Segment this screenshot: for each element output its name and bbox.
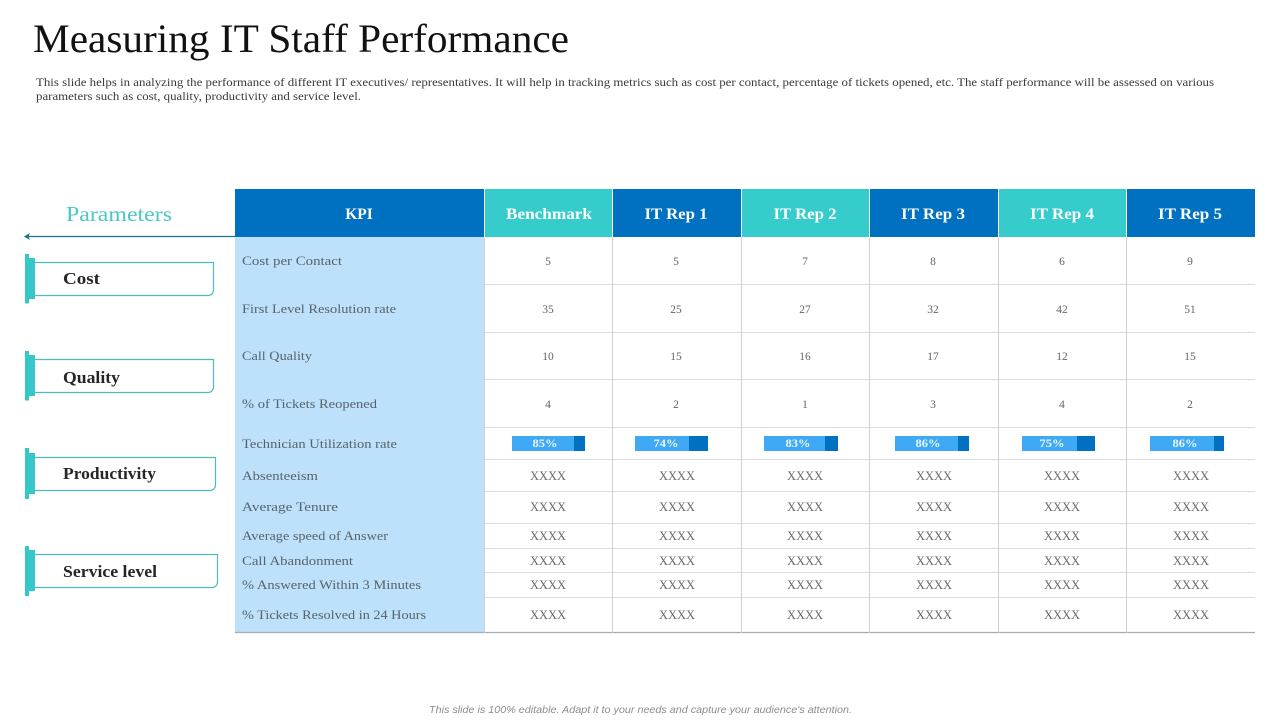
row: First Level Resolution rate: 42 [1056, 304, 1068, 316]
row: Average speed of Answer: XXXX [659, 529, 695, 543]
table header: IT Rep 4 [1030, 206, 1094, 223]
row: % of Tickets Reopened: 1 [802, 399, 808, 411]
row: Average speed of Answer: XXXX [787, 529, 823, 543]
row: First Level Resolution rate [242, 301, 1196, 316]
row: % of Tickets Reopened: 4 [1059, 399, 1065, 411]
row: Technician Utilization rate [242, 436, 1224, 451]
row: % Tickets Resolved in 24 Hours: XXXX [1044, 608, 1080, 622]
parameter: Productivity [25, 448, 216, 499]
row: % Answered Within 3 Minutes [242, 577, 1209, 592]
row: Average speed of Answer: XXXX [530, 529, 566, 543]
row: Average speed of Answer: XXXX [1044, 529, 1080, 543]
row: Absenteeism: XXXX [1173, 469, 1209, 483]
row: % Answered Within 3 Minutes: XXXX [659, 578, 695, 592]
row: % of Tickets Reopened: 4 [545, 399, 551, 411]
row: Cost per Contact: 6 [1059, 256, 1065, 268]
row: Average Tenure: XXXX [1044, 500, 1080, 514]
row: Call Abandonment: XXXX [530, 554, 566, 568]
row: Average Tenure: XXXX [659, 500, 695, 514]
parameter: Service level [25, 546, 218, 596]
row: Call Quality: Call Quality [242, 348, 313, 363]
parameter: Productivity: Productivity [63, 464, 157, 483]
row: First Level Resolution rate: 25 [670, 304, 682, 316]
row: Call Quality: 15 [1184, 351, 1196, 363]
row: % Answered Within 3 Minutes: XXXX [916, 578, 952, 592]
parameter: Cost: Cost [63, 269, 100, 288]
title: Measuring IT Staff Performance [33, 16, 569, 61]
KPI table [235, 189, 1255, 633]
row: Absenteeism: XXXX [787, 469, 823, 483]
row: Call Abandonment: XXXX [916, 554, 952, 568]
parameter: Service level: Service level [63, 562, 157, 581]
row: Cost per Contact: 5 [545, 256, 551, 268]
progress bar: IT Rep 4 75%: 75% [1040, 436, 1064, 450]
parameter: Quality: Quality [63, 368, 121, 387]
table header: IT Rep 2 [774, 206, 837, 223]
row: Cost per Contact: 7 [802, 256, 808, 268]
row: % of Tickets Reopened: 2 [673, 399, 679, 411]
table header: Benchmark [506, 206, 592, 223]
table header: IT Rep 1 [644, 206, 708, 223]
row: % Tickets Resolved in 24 Hours: XXXX [1173, 608, 1209, 622]
row: First Level Resolution rate: 27 [799, 304, 811, 316]
row: % Tickets Resolved in 24 Hours: XXXX [530, 608, 566, 622]
parameter: Cost [25, 254, 214, 304]
row: Call Quality: 16 [799, 351, 811, 363]
progress bar: IT Rep 2 83%: 83% [786, 436, 810, 450]
row: Average Tenure: XXXX [916, 500, 952, 514]
row: Average speed of Answer: Average speed of Answer [242, 528, 389, 543]
row: Average speed of Answer [242, 528, 1209, 543]
progress bar: IT Rep 5 86%: 86% [1172, 436, 1198, 450]
row: % of Tickets Reopened [242, 396, 1193, 411]
progress bar: IT Rep 1 74% [635, 436, 708, 451]
row: Average Tenure: XXXX [787, 500, 823, 514]
row: Call Quality: 12 [1056, 351, 1068, 363]
row: Call Abandonment [242, 553, 1209, 568]
row: Call Abandonment: XXXX [659, 554, 695, 568]
row: Average Tenure: XXXX [530, 500, 566, 514]
description text: parameters such as cost, quality, productivity and service level. [36, 91, 361, 103]
table header: IT Rep 5 [1158, 206, 1222, 223]
row: Absenteeism: XXXX [530, 469, 566, 483]
row: Average Tenure: XXXX [1173, 500, 1209, 514]
row: Absenteeism: Absenteeism [242, 468, 318, 483]
progress bar: Benchmark 85% [512, 436, 585, 451]
row: Call Abandonment: Call Abandonment [242, 553, 353, 568]
row: Technician Utilization rate: Technician Utilization rate [242, 436, 397, 451]
row: Call Quality: 10 [542, 351, 554, 363]
row: First Level Resolution rate: First Level Resolution rate [242, 301, 396, 316]
row: % of Tickets Reopened: 3 [930, 399, 936, 411]
row: First Level Resolution rate: 51 [1184, 304, 1196, 316]
row: Call Quality: 15 [670, 351, 682, 363]
progress bar: Benchmark 85%: 85% [532, 436, 558, 450]
parameter: Quality [25, 351, 214, 400]
row: Cost per Contact: 9 [1187, 256, 1193, 268]
row: Average speed of Answer: XXXX [1173, 529, 1209, 543]
row: Call Quality: 17 [927, 351, 939, 363]
row: % Answered Within 3 Minutes: XXXX [787, 578, 823, 592]
table header: KPI [345, 206, 373, 223]
parameters heading: Parameters [66, 202, 172, 226]
row: Cost per Contact [242, 253, 1193, 268]
footer note: This slide is 100% editable. Adapt it to your needs and capture your audience's attention. [429, 704, 852, 716]
row: % Answered Within 3 Minutes: XXXX [1173, 578, 1209, 592]
progress bar: IT Rep 4 75% [1022, 436, 1095, 451]
row: % Tickets Resolved in 24 Hours: XXXX [659, 608, 695, 622]
table header: IT Rep 3 [901, 206, 965, 223]
row: % Tickets Resolved in 24 Hours: XXXX [916, 608, 952, 622]
row: Call Abandonment: XXXX [1044, 554, 1080, 568]
row: % Answered Within 3 Minutes: % Answered Within 3 Minutes [242, 577, 421, 592]
row: Absenteeism: XXXX [916, 469, 952, 483]
KPI column background [235, 237, 484, 633]
row: Cost per Contact: Cost per Contact [242, 253, 342, 268]
row: Call Abandonment: XXXX [1173, 554, 1209, 568]
row: % Tickets Resolved in 24 Hours [242, 607, 1209, 622]
row: Average speed of Answer: XXXX [916, 529, 952, 543]
progress bar: IT Rep 3 86% [895, 436, 969, 451]
row: Cost per Contact: 8 [930, 256, 936, 268]
row: Average Tenure [242, 499, 1209, 514]
row: % of Tickets Reopened: % of Tickets Reopened [242, 396, 378, 411]
description text [36, 77, 1215, 103]
row: % Tickets Resolved in 24 Hours: % Tickets Resolved in 24 Hours [242, 607, 426, 622]
progress bar: IT Rep 1 74%: 74% [654, 436, 678, 450]
description text: This slide helps in analyzing the performance of different IT executives/ representatives. It will help in tracking metrics such as cost per contact, percentage of tickets opened, etc. The staff performance will be assessed on various [36, 77, 1215, 89]
row: % Answered Within 3 Minutes: XXXX [530, 578, 566, 592]
progress bar: IT Rep 5 86% [1150, 436, 1224, 451]
arrow: parameters pointer [24, 233, 236, 240]
row: Call Quality [242, 348, 1196, 363]
row: Cost per Contact: 5 [673, 256, 679, 268]
row: Call Abandonment: XXXX [787, 554, 823, 568]
row: Absenteeism: XXXX [1044, 469, 1080, 483]
row: First Level Resolution rate: 35 [542, 304, 554, 316]
row: % of Tickets Reopened: 2 [1187, 399, 1193, 411]
row: % Tickets Resolved in 24 Hours: XXXX [787, 608, 823, 622]
row: Average Tenure: Average Tenure [242, 499, 338, 514]
row: Absenteeism: XXXX [659, 469, 695, 483]
table header [235, 189, 1255, 237]
progress bar: IT Rep 2 83% [764, 436, 838, 451]
row: Absenteeism [242, 468, 1209, 483]
row: First Level Resolution rate: 32 [927, 304, 939, 316]
progress bar: IT Rep 3 86%: 86% [916, 436, 940, 450]
row: % Answered Within 3 Minutes: XXXX [1044, 578, 1080, 592]
